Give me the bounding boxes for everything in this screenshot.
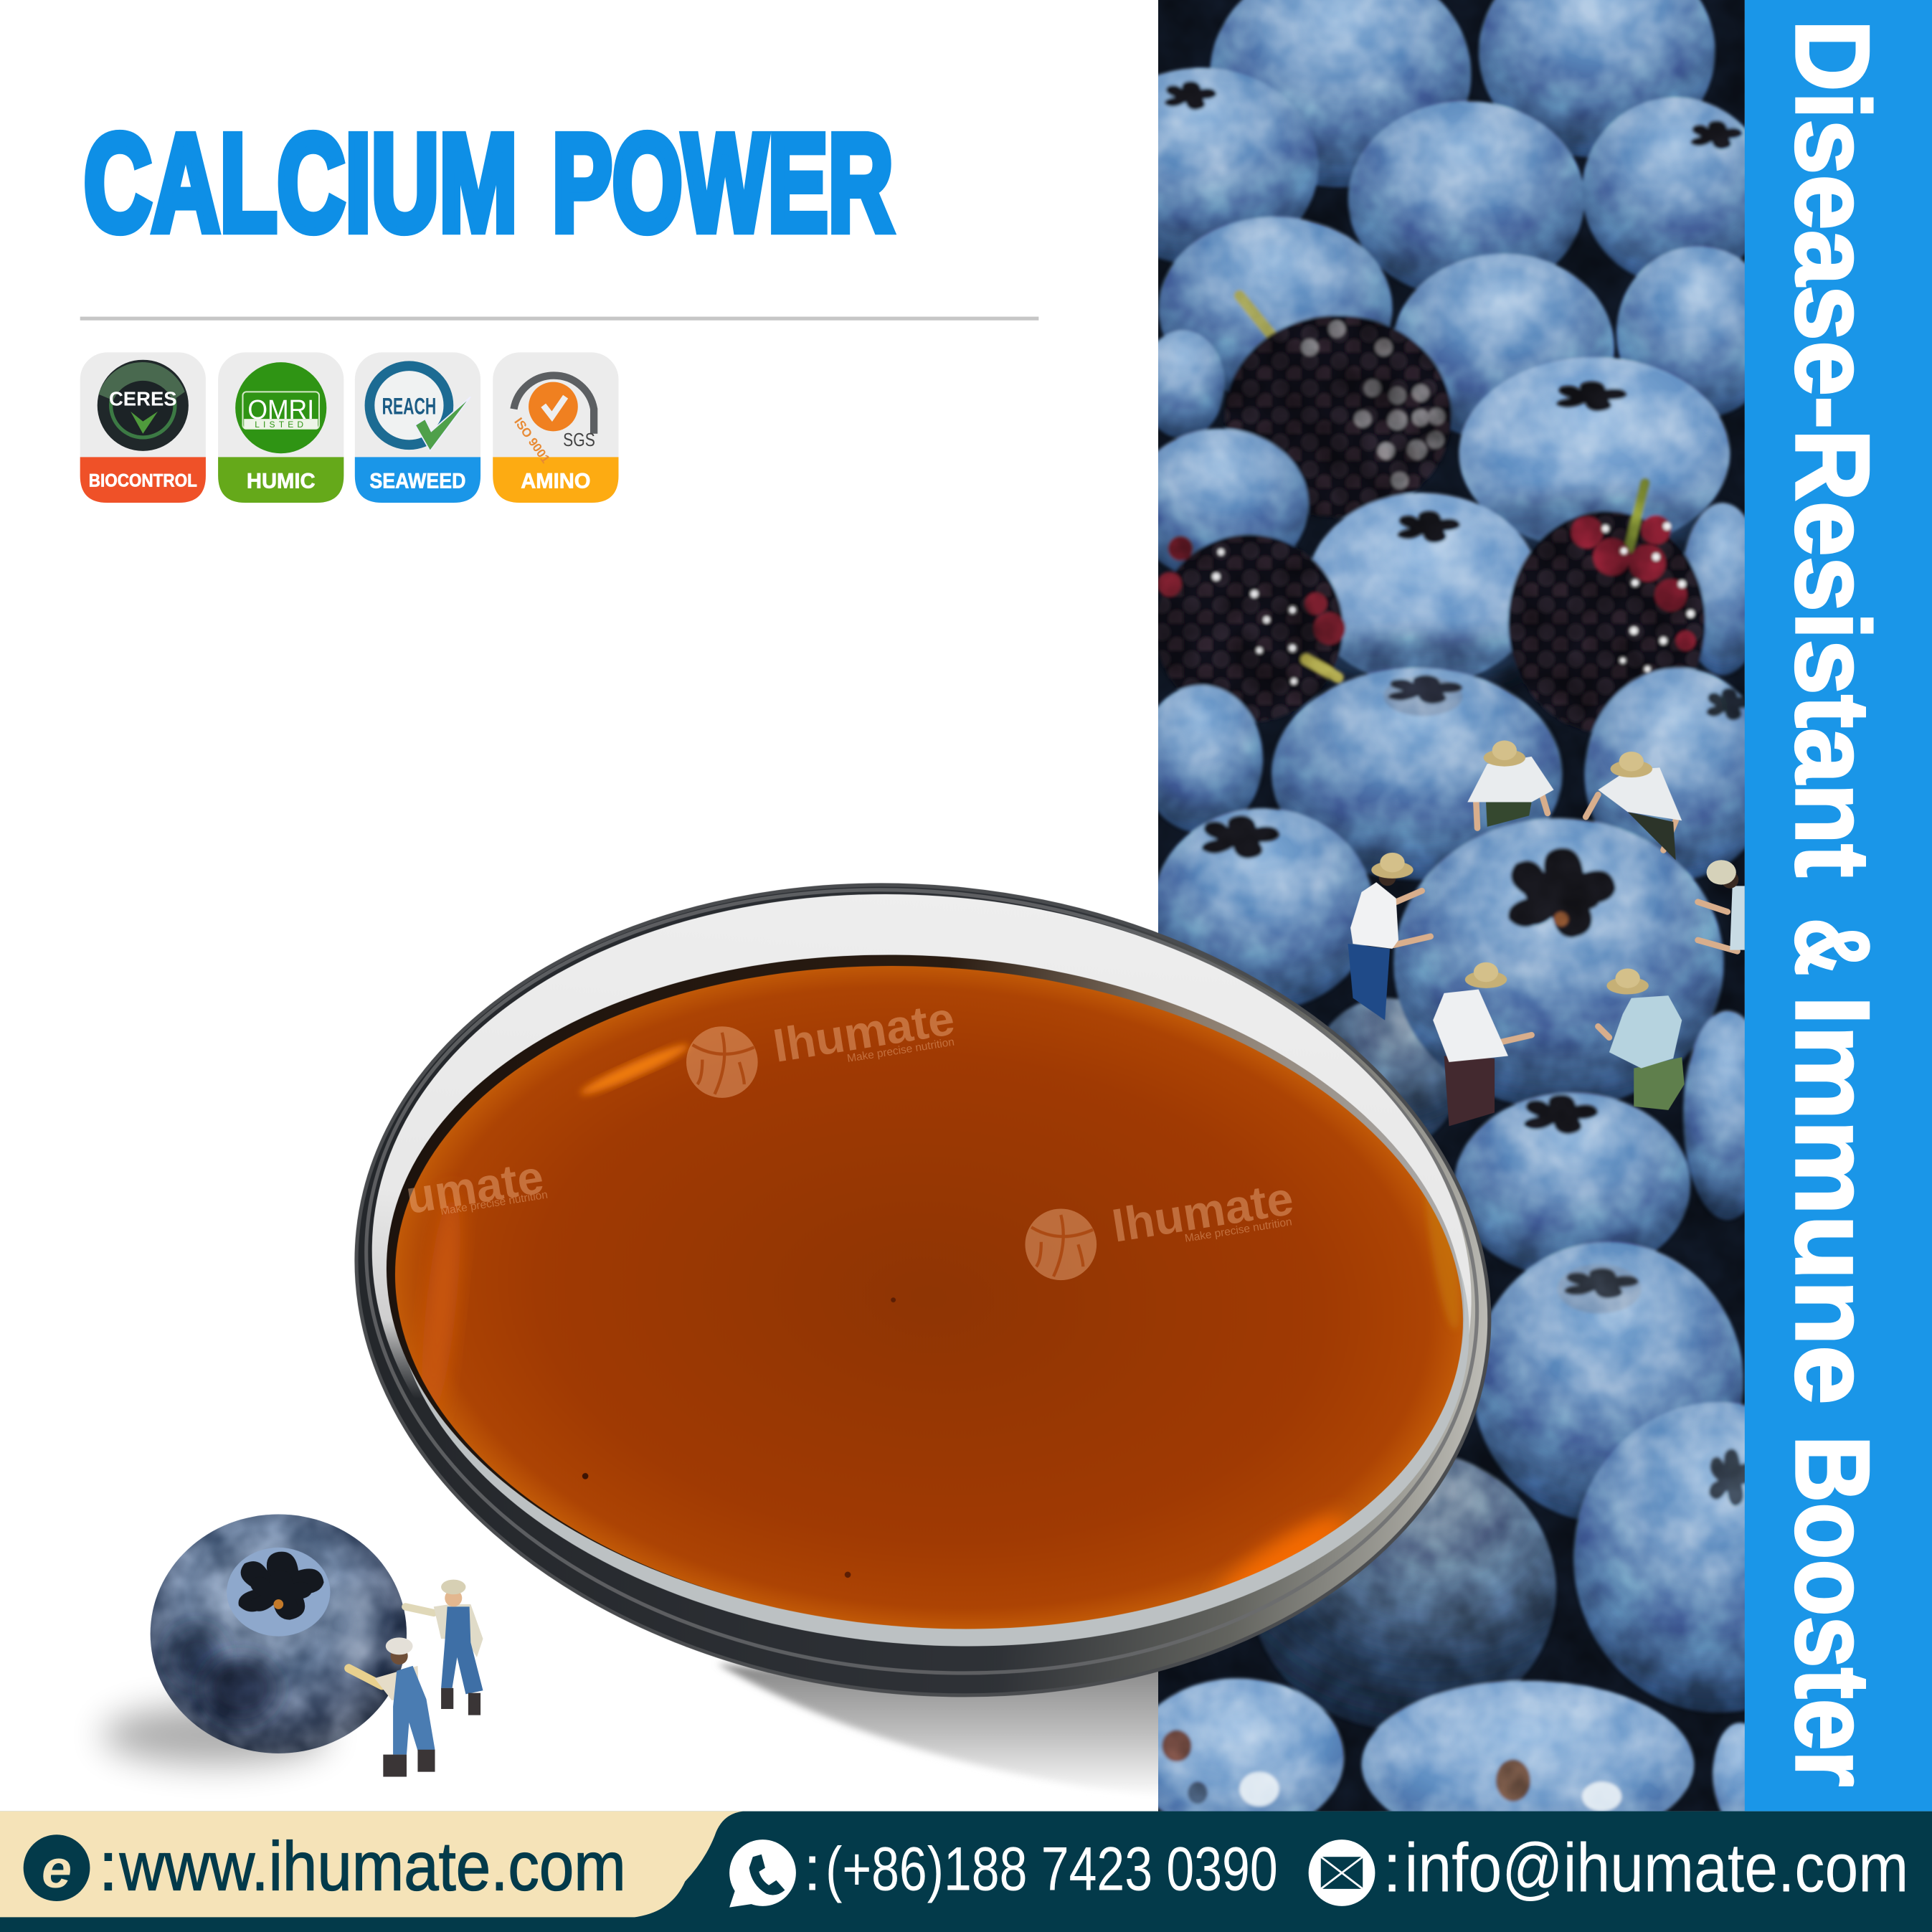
footer bar — [0, 1812, 1932, 1932]
banner headline — [1774, 19, 1891, 1786]
watermark: Ihumate — [770, 992, 958, 1072]
title: POWER — [552, 105, 894, 260]
badge: seaweed — [355, 352, 480, 503]
watermark: Ihumate — [1109, 1172, 1297, 1252]
figure 4 — [1433, 962, 1532, 1126]
worker pushing — [349, 1637, 435, 1777]
figure 2 — [1586, 752, 1682, 860]
watermark: Make precise nutrition — [1184, 1216, 1293, 1245]
icon: email — [1309, 1839, 1375, 1906]
figure 5 — [1598, 968, 1685, 1110]
email text: : — [1383, 1829, 1401, 1906]
watermark: umate — [402, 1150, 547, 1223]
watermark — [402, 992, 1297, 1280]
watermark: Make precise nutrition — [440, 1189, 549, 1218]
footer bar: (+86)188 7423 0390 — [825, 1835, 1278, 1904]
vertical banner — [1745, 0, 1932, 1812]
shadow under dish — [717, 1659, 1158, 1791]
badge: humic — [218, 352, 344, 503]
miniature figures on blueberry — [1348, 741, 1745, 1126]
liquid highlights — [415, 1038, 1467, 1621]
badge: amino: SGS — [563, 430, 595, 450]
badge: biocontrol: BIOCONTROL — [89, 471, 197, 491]
badge: biocontrol: CERES — [109, 387, 177, 409]
glass dish with liquid — [354, 883, 1492, 1697]
banner headline: & — [1774, 918, 1891, 976]
banner headline: Booster — [1774, 1436, 1891, 1786]
figure 3 — [1348, 853, 1431, 1021]
website text: : — [98, 1829, 118, 1905]
badge: humic: HUMIC — [247, 470, 316, 493]
icon: web — [24, 1834, 90, 1901]
icon: web: e — [42, 1839, 72, 1900]
badge: seaweed: SEAWEED — [369, 470, 465, 493]
banner headline: Immune — [1774, 995, 1891, 1405]
footer bar: www.ihumate.com — [119, 1829, 626, 1905]
badge: humic: LISTED — [255, 420, 307, 430]
badge: biocontrol — [80, 352, 206, 503]
badge: humic: OMRI — [247, 395, 314, 425]
badge: amino — [493, 352, 618, 503]
photo: blueberries and blackberries — [1158, 0, 1745, 1812]
badge: amino: AMINO — [521, 470, 591, 493]
inner dark edge — [364, 919, 1487, 1663]
figure 1 — [1467, 741, 1554, 828]
banner headline: Disease-Resistant — [1774, 19, 1891, 877]
website panel — [0, 1812, 743, 1917]
figure 6 — [1698, 860, 1745, 951]
phone text: : — [803, 1832, 821, 1904]
watermark: Make precise nutrition — [846, 1036, 955, 1065]
badge: seaweed: REACH — [382, 392, 436, 419]
certification badges — [80, 352, 618, 503]
lower rim highlight — [371, 935, 1492, 1682]
small blueberry with workers — [103, 1513, 483, 1777]
liquid surface — [372, 931, 1485, 1665]
title: CALCIUM — [84, 105, 518, 260]
badge: amino: ISO 9001 — [511, 415, 553, 466]
worker standing — [405, 1580, 483, 1715]
icon: phone — [729, 1839, 796, 1908]
